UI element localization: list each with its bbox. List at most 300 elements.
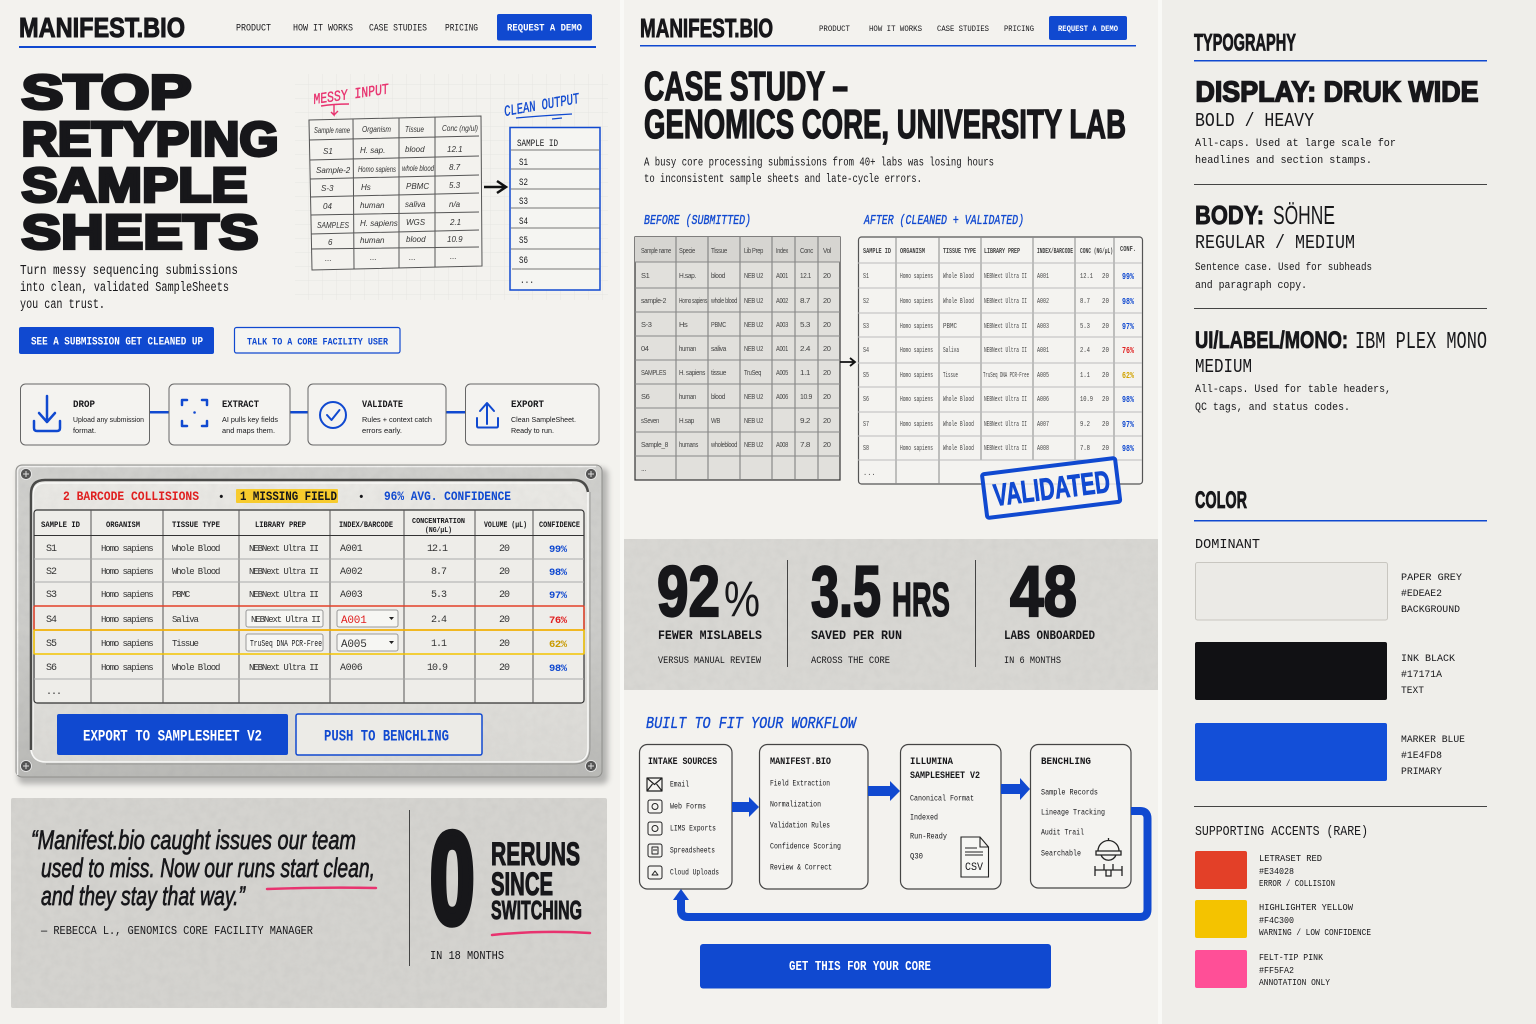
after table: Homo sapiens	[900, 323, 933, 331]
status bar: •	[358, 492, 365, 504]
messy table: whole blood	[402, 164, 434, 173]
box: intake sources: Email	[670, 780, 689, 790]
case study title: CASE STUDY –	[644, 63, 848, 109]
box: intake sources: INTAKE SOURCES	[648, 756, 717, 768]
nav links	[819, 24, 1034, 34]
before table: 20	[823, 296, 831, 305]
after table: 98%	[1122, 296, 1134, 307]
navigation: landing page	[19, 12, 596, 48]
step: validate: errors early.	[362, 426, 402, 435]
before table: 20	[823, 271, 831, 280]
row S1: Homo sapiens	[101, 544, 153, 554]
row S6: NEBNext Ultra II	[249, 663, 319, 673]
messy table: PBMC	[406, 182, 429, 191]
after table: S1	[863, 273, 869, 281]
button: see a submission: SEE A SUBMISSION GET CLEANED UP	[31, 336, 203, 348]
attribution: — REBECCA L., GENOMICS CORE FACILITY MANAGER	[40, 925, 313, 938]
before table: wholeblood	[710, 440, 737, 449]
box: manifest.bio: MANIFEST.BIO	[770, 756, 831, 768]
after table: NEBNext Ultra II	[984, 396, 1027, 404]
before table: NEB U2	[744, 320, 763, 329]
spec: display: All-caps. Used at large scale for	[1195, 138, 1396, 150]
row S5 highlighted yellow: TruSeq DNA PCR-Free	[250, 639, 322, 649]
before table: 12.1	[800, 271, 811, 280]
after table: Saliva	[943, 347, 959, 355]
before table: Index	[776, 246, 788, 255]
table header: INDEX/BARCODE	[339, 520, 393, 530]
after table: ...	[863, 470, 876, 478]
messy table: S1	[323, 147, 333, 156]
stat: 92 percent	[657, 553, 762, 667]
step: export: Ready to run.	[511, 426, 554, 435]
messy table: H. sapiens	[360, 219, 398, 228]
clean table: ...	[520, 276, 534, 287]
before table: Sample name	[641, 246, 671, 255]
before table: Conc	[800, 246, 814, 255]
messy table: WGS	[406, 218, 426, 227]
headline: STOP	[22, 66, 192, 120]
headline: RETYPING	[22, 114, 278, 166]
panel: landing page background	[0, 0, 620, 1024]
step: validate	[308, 384, 446, 445]
spec: display: DISPLAY: DRUK WIDE	[1196, 76, 1478, 108]
before table	[635, 237, 840, 480]
stat: 3.5 hours: HRS	[892, 574, 950, 627]
table header: CONCENTRATION	[412, 518, 465, 526]
after table: A003	[1037, 323, 1049, 331]
case study intro: to inconsistent sample sheets and late-cycle errors.	[644, 173, 922, 186]
step: drop	[20, 384, 150, 445]
step: drop: Upload any submission	[73, 415, 144, 424]
case study intro: A busy core processing submissions from 40+ labs was losing hours	[644, 156, 994, 170]
stat: 48 labs	[1004, 553, 1095, 667]
after table: INDEX/BARCODE	[1037, 248, 1073, 256]
messy table: n/a	[449, 200, 461, 209]
stat: 3.5 hours	[811, 553, 950, 667]
after table: 12.1	[1080, 273, 1093, 281]
label: before: BEFORE (SUBMITTED)	[644, 213, 751, 229]
after table: S3	[863, 323, 869, 331]
label: after: AFTER (CLEANED + VALIDATED)	[863, 213, 1024, 229]
messy table: human	[360, 236, 385, 245]
status bar: •	[218, 492, 225, 504]
button: request a demo	[1049, 16, 1127, 40]
before table: NEB U2	[744, 416, 763, 425]
after table: S4	[863, 347, 869, 355]
icon: csv file: CSV	[965, 862, 983, 874]
before table: A005	[776, 368, 788, 377]
icon: download	[34, 396, 60, 431]
screws	[20, 468, 596, 772]
stamp: validated	[982, 458, 1120, 518]
row S6: 10.9	[427, 663, 448, 674]
step: export	[466, 384, 599, 445]
row S1: S1	[46, 544, 57, 555]
spec: body: REGULAR / MEDIUM	[1195, 232, 1355, 254]
row S5 highlighted yellow: Homo sapiens	[101, 639, 153, 649]
panel: metal-framed validation screen	[16, 465, 608, 784]
step: extract: and maps them.	[222, 426, 275, 435]
before table: 10.9	[800, 392, 812, 401]
before table: S1	[641, 271, 650, 280]
box: benchling: BENCHLING	[1041, 756, 1091, 768]
messy table: 8.7	[449, 163, 461, 172]
row S5 highlighted yellow: 62%	[549, 639, 568, 651]
before table: 8.7	[800, 296, 810, 305]
subheading	[20, 264, 238, 313]
messy table: ...	[370, 253, 377, 262]
before table: blood	[711, 392, 725, 401]
box: manifest.bio	[760, 744, 868, 889]
arrow	[484, 181, 506, 193]
before table: 1.1	[800, 368, 810, 377]
subheading: you can trust.	[20, 298, 105, 313]
data table: ...	[46, 687, 61, 698]
after table: NEBNext Ultra II	[984, 298, 1027, 306]
table header: ORGANISM	[106, 520, 140, 530]
after table: NEBNext Ultra II	[984, 445, 1027, 453]
nav links: PRODUCT	[236, 24, 271, 34]
messy table: ...	[450, 252, 457, 261]
icon: csv file	[961, 837, 988, 877]
spec: body	[1195, 200, 1372, 292]
messy table: Tissue	[405, 125, 424, 134]
step: extract: AI pulls key fields	[222, 415, 278, 424]
after table: S8	[863, 445, 869, 453]
after table: 1.1	[1080, 372, 1090, 380]
after table: NEBNext Ultra II	[984, 347, 1027, 355]
row S4 highlighted red: NEBNext Ultra II	[251, 615, 321, 625]
after table: Homo sapiens	[900, 273, 933, 281]
row S6: A006	[340, 663, 363, 674]
step: drop: format.	[73, 426, 96, 435]
table header: (NG/µL)	[425, 527, 452, 535]
before table: Homo sapiens	[679, 296, 707, 305]
before table: 20	[823, 368, 831, 377]
after table: Whole Blood	[943, 421, 974, 429]
after table: Homo sapiens	[900, 347, 933, 355]
swatch: letraset red	[1195, 851, 1335, 889]
button: talk to a core facility user: TALK TO A CORE FACILITY USER	[247, 338, 388, 348]
after table: PBMC	[943, 323, 957, 331]
after table: 5.3	[1080, 323, 1090, 331]
before table: A002	[776, 296, 788, 305]
spec: mono: MEDIUM	[1195, 356, 1252, 378]
nav links: HOW IT WORKS	[293, 24, 353, 34]
before table: 20	[823, 416, 831, 425]
step: export: Clean SampleSheet.	[511, 415, 576, 424]
swatch: felt-tip pink: #FF5FA2	[1259, 966, 1294, 976]
row S6	[46, 663, 568, 675]
after table: NEBNext Ultra II	[984, 323, 1027, 331]
after table: Whole Blood	[943, 273, 974, 281]
row S3: 5.3	[431, 590, 447, 601]
messy table: Conc (ng/ul)	[442, 124, 478, 133]
box: intake sources	[640, 744, 732, 889]
swatch: marker blue: MARKER BLUE	[1401, 734, 1465, 746]
spec: body: BODY:	[1195, 200, 1264, 230]
box: manifest.bio: Review & Correct	[770, 862, 832, 872]
button: get this for your core	[700, 944, 1051, 988]
status bar: 2 BARCODE COLLISIONS	[63, 489, 199, 504]
after table: 99%	[1122, 271, 1134, 282]
before table: tissue	[711, 368, 726, 377]
row S4 highlighted red: 76%	[549, 615, 568, 627]
swatch: ink black	[1195, 642, 1456, 700]
spec: body: SÖHNE	[1273, 200, 1335, 230]
row S1: Whole Blood	[172, 544, 220, 554]
stat: 92 percent: %	[724, 571, 760, 627]
before table: Tissue	[711, 246, 727, 255]
swatch: ink black: #17171A	[1401, 669, 1443, 681]
row S2: NEBNext Ultra II	[249, 567, 319, 577]
swatch: paper grey: PAPER GREY	[1401, 572, 1463, 584]
swatch: paper grey	[1196, 562, 1463, 620]
messy table: Hs	[361, 183, 371, 192]
after table: A001	[1037, 347, 1049, 355]
before table: NEB U2	[744, 440, 763, 449]
row S5 highlighted yellow: S5	[46, 639, 57, 650]
swatch: felt-tip pink	[1195, 950, 1331, 988]
before table: sSeven	[641, 416, 659, 425]
before table: 5.3	[800, 320, 810, 329]
before table: H.sap.	[679, 271, 696, 280]
after table: 10.9	[1080, 396, 1093, 404]
row S6: Homo sapiens	[101, 663, 153, 673]
table header: SAMPLE ID	[41, 520, 80, 530]
after table: Homo sapiens	[900, 445, 933, 453]
case study title: GENOMICS CORE, UNIVERSITY LAB	[644, 101, 1126, 147]
stat: zero reruns: 0	[430, 805, 474, 951]
spec: display: headlines and section stamps.	[1195, 155, 1372, 167]
row S6: Whole Blood	[172, 663, 220, 673]
button: request a demo	[497, 14, 592, 40]
button: talk to a core facility user	[234, 328, 400, 353]
before table: A006	[776, 392, 788, 401]
box: illumina samplesheet: Run-Ready	[910, 832, 947, 842]
table header: LIBRARY PREP	[255, 520, 306, 530]
before table: PBMC	[711, 320, 727, 329]
messy table: ...	[325, 254, 332, 263]
swatch: marker blue: #1E4FD8	[1401, 750, 1442, 762]
after table: 20	[1102, 421, 1109, 429]
row S4 highlighted red: Saliva	[172, 615, 200, 625]
before table: NEB U2	[744, 296, 763, 305]
clean table: S1	[519, 158, 528, 169]
messy table	[309, 116, 482, 270]
stat: 3.5 hours: SAVED PER RUN	[811, 628, 902, 643]
spec: mono: UI/LABEL/MONO:	[1195, 327, 1348, 354]
after table: A008	[1037, 445, 1049, 453]
box: intake sources: Cloud Uploads	[670, 868, 719, 878]
spec: mono: All-caps. Used for table headers,	[1195, 384, 1391, 396]
heading: color: COLOR	[1195, 487, 1247, 514]
spec: mono: QC tags, and status codes.	[1195, 402, 1350, 414]
before table: WB	[711, 416, 720, 425]
clean table: S2	[519, 178, 528, 189]
stamp: validated: VALIDATED	[991, 464, 1112, 513]
row S1: 20	[499, 544, 510, 555]
status bar: 96% AVG. CONFIDENCE	[384, 489, 511, 504]
row S1: NEBNext Ultra II	[249, 544, 319, 554]
row S4 highlighted red: 20	[499, 615, 510, 626]
after table: Homo sapiens	[900, 421, 933, 429]
messy table: 6	[328, 238, 333, 247]
after table: ORGANISM	[900, 248, 925, 256]
navigation: case study page	[640, 13, 1136, 46]
swatch: marker blue: PRIMARY	[1401, 766, 1443, 778]
before table: A003	[776, 320, 788, 329]
row S5 highlighted yellow: A005	[341, 639, 367, 651]
button: request a demo: REQUEST A DEMO	[507, 24, 582, 34]
workflow diagram	[640, 744, 1148, 917]
button: request a demo: REQUEST A DEMO	[1058, 24, 1118, 34]
after table: CONF.	[1120, 246, 1136, 254]
messy table: SAMPLES	[317, 221, 350, 230]
case study intro	[644, 156, 994, 186]
row S6: S6	[46, 663, 57, 674]
row S1: 99%	[549, 544, 568, 556]
before table: NEB U2	[744, 392, 763, 401]
button: push to benchling: PUSH TO BENCHLING	[324, 728, 449, 746]
clean table: SAMPLE ID	[517, 139, 558, 150]
swatch: ink black: TEXT	[1401, 685, 1424, 697]
after table: Whole Blood	[943, 396, 974, 404]
box: illumina samplesheet: Indexed	[910, 812, 938, 822]
arrow: intake to manifest	[732, 797, 759, 817]
before table: 04	[641, 344, 649, 353]
button: see a submission	[19, 327, 214, 354]
panel: stats band	[624, 539, 1158, 690]
messy table: 10.9	[447, 235, 463, 244]
box: intake sources: Web Forms	[670, 802, 706, 812]
after table: TruSeq DNA PCR-Free	[983, 372, 1029, 380]
status bar	[63, 489, 511, 504]
sketch: messy input to clean output	[295, 74, 608, 300]
after table: A007	[1037, 421, 1049, 429]
row S3: Homo sapiens	[101, 590, 153, 600]
row S3: NEBNext Ultra II	[249, 590, 319, 600]
after table: LIBRARY PREP	[984, 248, 1020, 256]
messy table: 5.3	[449, 181, 461, 190]
nav links: CASE STUDIES	[369, 24, 427, 34]
label: dominant: DOMINANT	[1195, 538, 1260, 553]
row S3: PBMC	[172, 590, 191, 600]
button: get this for your core: GET THIS FOR YOUR CORE	[789, 959, 931, 975]
icon: bioreactor	[1095, 838, 1122, 876]
box: manifest.bio: Confidence Scoring	[770, 842, 841, 852]
after table: 97%	[1122, 321, 1134, 332]
before table: human	[679, 392, 696, 401]
after table: 8.7	[1080, 298, 1090, 306]
nav links	[236, 24, 478, 34]
before table: NEB U2	[744, 344, 763, 353]
step: validate: VALIDATE	[362, 399, 403, 411]
step: drop: DROP	[73, 399, 95, 411]
after table: 97%	[1122, 419, 1134, 430]
stat: zero reruns: SWITCHING	[491, 895, 582, 925]
table header: VOLUME (µL)	[484, 520, 527, 530]
before table: A008	[776, 440, 788, 449]
before table: 20	[823, 440, 831, 449]
row S3: 97%	[549, 590, 568, 602]
row S2: 20	[499, 567, 510, 578]
subheading: Turn messy sequencing submissions	[20, 264, 238, 279]
label: messy input: MESSY INPUT	[312, 81, 391, 109]
after table: 9.2	[1080, 421, 1090, 429]
before table: humans	[679, 440, 698, 449]
messy table: Organism	[362, 125, 391, 134]
after table: 20	[1102, 347, 1109, 355]
stat: 92 percent: VERSUS MANUAL REVIEW	[658, 655, 762, 667]
before table: S6	[641, 392, 650, 401]
row S4 highlighted red: Homo sapiens	[101, 615, 153, 625]
swatch: letraset red: LETRASET RED	[1259, 853, 1322, 864]
panel: style guide background	[1162, 0, 1536, 1024]
box: intake sources: Spreadsheets	[670, 846, 715, 856]
step: extract	[169, 384, 290, 445]
box: illumina samplesheet: Canonical Format	[910, 794, 974, 804]
box: manifest.bio: Field Extraction	[770, 778, 830, 788]
box: illumina samplesheet	[900, 744, 1001, 889]
stat: 92 percent: 92	[657, 553, 720, 632]
stat: zero reruns: SINCE	[491, 866, 553, 902]
messy table: saliva	[405, 200, 426, 209]
nav links: PRICING	[445, 24, 478, 34]
button: export to samplesheet	[57, 714, 288, 755]
arrow: manifest to illumina	[868, 781, 900, 801]
table header: CONFIDENCE	[539, 520, 580, 530]
button: export to samplesheet: EXPORT TO SAMPLESHEET V2	[83, 728, 262, 746]
messy table: 2.1	[449, 218, 461, 227]
status bar: 1 MISSING FIELD	[240, 489, 337, 504]
before table: A001	[776, 271, 788, 280]
row S5 highlighted yellow	[34, 630, 584, 654]
after table: A006	[1037, 396, 1049, 404]
after table: A001	[1037, 273, 1049, 281]
after table: CONC (NG/µL)	[1080, 248, 1113, 256]
step: validate: Rules + context catch	[362, 415, 432, 424]
arrow: feedback loop	[673, 811, 1148, 917]
after table: Homo sapiens	[900, 372, 933, 380]
before table: Sample_8	[641, 440, 668, 449]
swatch: paper grey: BACKGROUND	[1401, 604, 1460, 616]
before table: 7.8	[800, 440, 810, 449]
row S2: Homo sapiens	[101, 567, 153, 577]
headline: SHEETS	[22, 206, 258, 260]
before table: A001	[776, 344, 788, 353]
before table: Specie	[679, 246, 695, 255]
after table: 20	[1102, 445, 1109, 453]
heading: built to fit your workflow: BUILT TO FIT YOUR WORKFLOW	[646, 715, 857, 734]
before table: sample-2	[641, 296, 666, 305]
row S6: 98%	[549, 663, 568, 675]
after table: 98%	[1122, 443, 1134, 454]
quote: used to miss. Now our runs start clean,	[41, 853, 375, 883]
before table: Lib Prep	[744, 246, 763, 255]
box: intake sources: LIMS Exports	[670, 824, 716, 834]
messy table: Sample name	[314, 126, 350, 135]
spec: body: and paragraph copy.	[1195, 280, 1307, 292]
messy table: 04	[323, 202, 332, 211]
row S2: S2	[46, 567, 57, 578]
icon: check circle	[320, 402, 346, 428]
swatch: highlighter yellow	[1195, 900, 1371, 938]
clean table: S5	[519, 236, 528, 247]
box: benchling: Sample Records	[1041, 788, 1098, 798]
stat: 92 percent: FEWER MISLABELS	[658, 628, 762, 643]
stat: zero reruns: RERUNS	[491, 836, 580, 872]
